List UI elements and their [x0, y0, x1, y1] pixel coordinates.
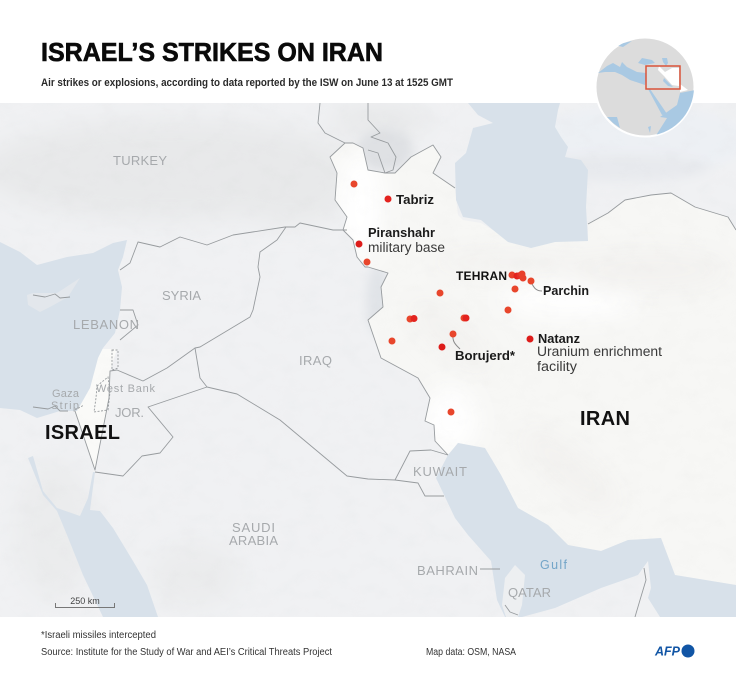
- country label: Saudi Arabia: ARABIA: [229, 533, 278, 548]
- strike markers: [350, 180, 534, 416]
- scale bar: 250 km: [70, 596, 100, 606]
- land: Iran: [330, 144, 642, 454]
- label: Gaza Strip: [51, 388, 80, 412]
- city label: Piranshahr military base: [368, 226, 445, 255]
- globe: Red Sea: [648, 89, 667, 115]
- country label: Kuwait: KUWAIT: [413, 464, 467, 479]
- country label: Saudi Arabia: SAUDI: [232, 520, 275, 535]
- country label: Iran: IRAN: [580, 408, 630, 430]
- borders: [33, 103, 736, 617]
- label: Gaza Strip: Strip: [51, 400, 79, 412]
- country label: Turkey: TURKEY: [113, 153, 167, 168]
- disputed boundaries: [75, 350, 118, 412]
- globe: Black Sea: [638, 58, 655, 65]
- locator globe: [596, 38, 695, 137]
- source: Source: Institute for the Study of War and AEI’s Critical Threats Project: [41, 647, 332, 658]
- label: Jordan: JOR.: [115, 405, 144, 420]
- relief: Turkey highlands: [3, 136, 336, 209]
- subtitle: Air strikes or explosions, according to data reported by the ISW on June 13 at 1525 GMT: [41, 77, 453, 89]
- city label: Borujerd: Borujerd*: [455, 349, 515, 363]
- leader lines: [453, 282, 542, 349]
- map panel: [0, 102, 736, 617]
- label: West Bank: West Bank: [96, 383, 156, 395]
- title: ISRAEL’S STRIKES ON IRAN: [41, 39, 383, 67]
- relief: Sinai and Arabian desert: [15, 460, 240, 607]
- land: Israel: [75, 349, 117, 470]
- globe: Atlantic fragments: [618, 41, 632, 47]
- AFP logo: AFP: [654, 644, 681, 658]
- city label: Natanz uranium enrichment facility: facility: [537, 359, 577, 374]
- city label: Piranshahr military base: military base: [368, 240, 445, 255]
- city label: Parchin: Parchin: [543, 284, 589, 298]
- city label: Natanz uranium enrichment facility: Uranium enrichment: [537, 344, 662, 359]
- globe: Oman highlight: [680, 84, 688, 92]
- city label: Tabriz: Tabriz: [396, 193, 434, 207]
- globe: Iran highlight: [658, 66, 679, 86]
- globe: Caspian: [662, 58, 668, 66]
- country label: Qatar: QATAR: [508, 585, 551, 600]
- water: Caspian Sea: [455, 103, 588, 248]
- country label: Iraq: IRAQ: [299, 353, 332, 368]
- country label: Lebanon: LEBANON: [73, 317, 139, 332]
- land: Qatar: [502, 565, 525, 617]
- city label: Natanz uranium enrichment facility: [537, 332, 662, 374]
- water: Red Sea and gulfs: [28, 456, 158, 617]
- city label: Natanz uranium enrichment facility: Natanz: [538, 332, 580, 346]
- label: Gulf: Gulf: [540, 558, 568, 572]
- land: Cyprus: [27, 278, 80, 312]
- city label: Piranshahr military base: Piranshahr: [368, 226, 435, 240]
- country label: Saudi Arabia: [229, 520, 278, 548]
- globe: Indian Ocean: [656, 90, 694, 134]
- globe: Mediterranean: [598, 62, 646, 85]
- country label: Israel: ISRAEL: [45, 422, 120, 444]
- water: Mediterranean: [0, 240, 127, 418]
- water: Persian Gulf: [436, 443, 736, 617]
- map credit: Map data: OSM, NASA: [426, 647, 516, 658]
- globe: Persian Gulf: [663, 78, 673, 87]
- globe: locator box: [646, 66, 680, 89]
- terrain texture: [0, 103, 736, 617]
- city label: Tehran: TEHRAN: [456, 269, 507, 283]
- AFP logo: [654, 644, 694, 658]
- land base: [0, 103, 736, 617]
- footnote: *Israeli missiles intercepted: [41, 630, 156, 641]
- country label: Bahrain with leader: BAHRAIN: [417, 563, 478, 578]
- label: Gaza Strip: Gaza: [52, 388, 80, 400]
- country label: Syria: SYRIA: [162, 288, 201, 303]
- scale bar: [56, 596, 114, 608]
- relief: Caucasus and eastern plains: [360, 131, 412, 318]
